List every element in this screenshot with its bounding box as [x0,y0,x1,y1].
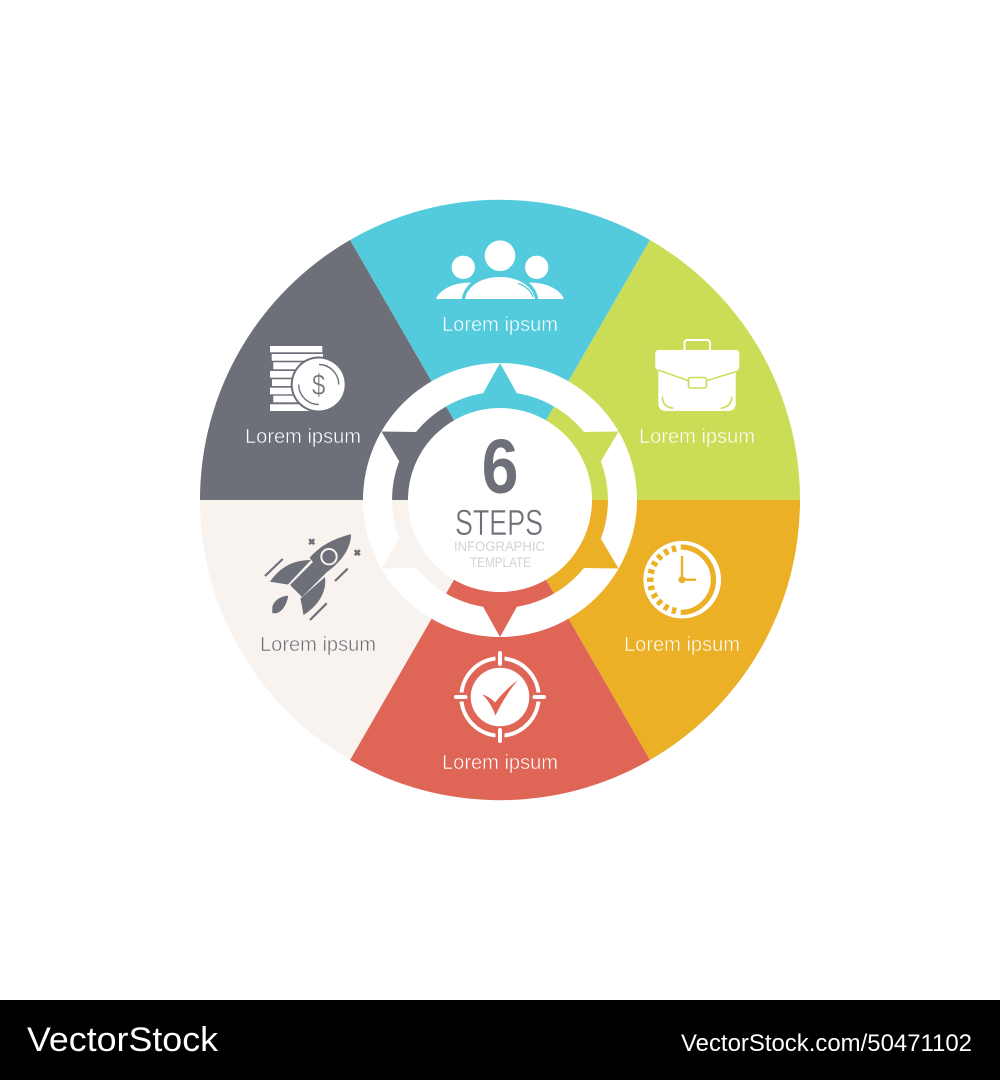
icon: clock [643,541,721,618]
label: gray sector: Lorem ipsum [245,426,361,448]
icon: coin stack with dollar [270,346,347,412]
label: cyan sector: Lorem ipsum [442,314,558,336]
subheading: INFOGRAPHIC: INFOGRAPHIC [454,539,545,554]
segmented wheel of six sectors [200,200,800,800]
subheading: TEMPLATE: TEMPLATE [470,555,531,570]
arrow segment: orange [542,493,646,615]
sector: green upper right [500,240,800,500]
inner arrow ring [354,363,646,637]
sector: orange lower right [500,500,800,760]
heading: STEPS: STEPS [455,502,543,543]
sector: red bottom [350,500,650,800]
center title block [454,424,545,570]
icon: briefcase [655,340,739,411]
icon: people group [436,240,564,299]
label: green sector: Lorem ipsum [639,426,755,448]
white hub disc [363,363,637,637]
sector: beige lower left [200,500,500,760]
icon: target with check mark [453,650,547,744]
arrow segment: cyan [446,363,554,420]
arrow segment: gray [354,385,458,507]
label: red sector: Lorem ipsum [442,752,558,774]
footer bar [0,1000,1000,1080]
icon: rocket [265,534,360,620]
big number 6: 6 [482,424,518,510]
label: orange sector: Lorem ipsum [624,634,740,656]
label: beige sector: Lorem ipsum [260,634,376,656]
arrow segment: beige [354,493,458,615]
footer logo text: VectorStock [27,1021,219,1059]
icon: coin stack with dollar: $ [312,367,325,402]
arrow segment: red [446,580,554,637]
footer image id: VectorStock.com/50471102 [681,1030,972,1057]
sector: gray upper left [200,240,500,500]
sector: cyan top [350,200,650,500]
arrow segment: green [542,385,646,507]
